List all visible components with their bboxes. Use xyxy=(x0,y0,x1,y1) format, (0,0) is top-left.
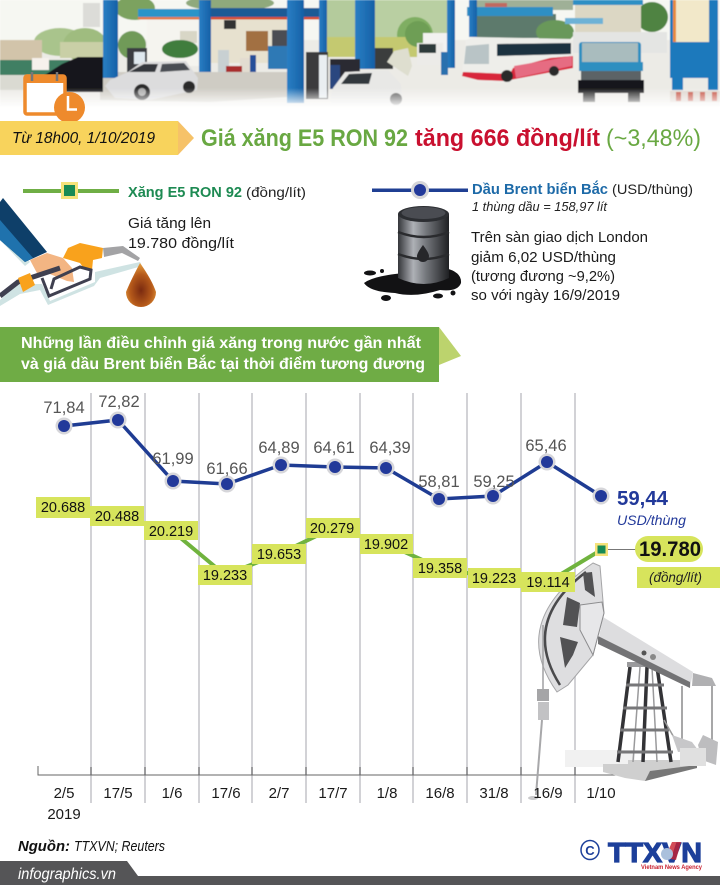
Brent value labels: 64,39 xyxy=(369,439,411,457)
date banner xyxy=(0,121,194,155)
x-axis dates: 1/8 xyxy=(377,785,397,802)
Brent value labels: 64,89 xyxy=(258,439,300,457)
blue truck xyxy=(578,42,644,102)
x-axis dates: 2/5 xyxy=(54,785,74,802)
title: Giá xăng E5 RON 92 xyxy=(201,125,408,152)
callout: latest Brent value: 59,44 xyxy=(617,488,669,510)
icon: oil pumpjack xyxy=(528,563,718,800)
icon: oil barrel xyxy=(364,206,461,301)
Brent value labels: 64,61 xyxy=(313,439,355,457)
beige car xyxy=(387,48,412,76)
source xyxy=(18,838,165,855)
x-axis dates: 2/7 xyxy=(269,785,289,802)
text: price rise xyxy=(128,215,235,252)
Brent value labels: 72,82 xyxy=(98,393,140,411)
white van xyxy=(417,33,447,65)
legend: E5 RON 92: (đồng/lít) xyxy=(246,184,306,200)
section banner: Những lần điều chỉnh giá xăng trong nước gần nhất xyxy=(21,335,421,352)
sign tower xyxy=(670,0,720,102)
x-axis dates: 17/5 xyxy=(103,785,133,802)
footer bar: infographics.vn xyxy=(18,866,116,883)
E5 value labels: 19.653 xyxy=(257,547,301,563)
TTXVN logo: Vietnam News Agency xyxy=(641,864,702,871)
white small car xyxy=(330,70,402,107)
photo: petrol station header xyxy=(0,0,720,114)
E5 value labels: 20.279 xyxy=(310,521,354,537)
Brent value labels: 58,81 xyxy=(418,473,460,491)
ground xyxy=(100,72,287,102)
E5 value labels: 19.114 xyxy=(526,575,570,591)
section banner: và giá dầu Brent biển Bắc tại thời điểm tương đương xyxy=(21,355,425,373)
x-axis dates: 17/7 xyxy=(318,785,348,802)
x-axis dates: 16/8 xyxy=(425,785,455,802)
x-axis dates: 1/6 xyxy=(162,785,182,802)
line: E5 RON 92 price xyxy=(63,507,636,582)
black SUV xyxy=(40,57,103,92)
x-axis dates: 16/9 xyxy=(533,785,563,802)
text: London market: Trên sàn giao dịch London xyxy=(471,229,648,246)
Brent value labels: 65,46 xyxy=(525,437,567,455)
legend: E5 RON 92 xyxy=(23,182,306,201)
E5 value labels: 20.688 xyxy=(41,500,85,516)
text: price rise: Giá tăng lên xyxy=(128,215,211,232)
E5 value labels: 20.219 xyxy=(149,524,193,540)
text: London market: giảm 6,02 USD/thùng xyxy=(471,249,616,266)
chart gridlines and axis xyxy=(38,393,628,803)
E5 value labels: 20.488 xyxy=(95,509,139,525)
source: Nguồn: xyxy=(18,838,70,855)
x-axis dates: 31/8 xyxy=(479,785,509,802)
Brent value labels: 59,25 xyxy=(473,473,515,491)
callout: latest E5 price: 19.780 xyxy=(639,538,701,561)
x-axis dates xyxy=(47,785,616,823)
TTXVN logo xyxy=(581,837,702,871)
text: price rise: 19.780 đồng/lít xyxy=(128,235,235,252)
date banner: Từ 18h00, 1/10/2019 xyxy=(12,130,155,147)
Brent value labels xyxy=(43,393,567,491)
silver SUV xyxy=(105,61,198,100)
title: tăng 666 đồng/lít xyxy=(415,125,600,152)
E5 value labels: 19.358 xyxy=(418,561,462,577)
Brent value labels: 61,99 xyxy=(152,450,194,468)
dispensers xyxy=(306,52,328,99)
icon: calendar and clock xyxy=(25,72,85,123)
text: London market xyxy=(471,229,648,304)
pillars xyxy=(103,0,477,103)
legend: Brent: Dầu Brent biển Bắc xyxy=(472,180,608,198)
title: (~3,48%) xyxy=(606,125,701,152)
bus xyxy=(462,37,573,83)
Brent value labels: 61,66 xyxy=(206,460,248,478)
callout: latest E5 price xyxy=(635,536,720,588)
footer bar xyxy=(0,861,720,885)
legend: Brent: 1 thùng dầu = 158,97 lít xyxy=(472,200,608,214)
text: London market: so với ngày 16/9/2019 xyxy=(471,287,620,304)
E5 value labels: 19.223 xyxy=(472,571,516,587)
source: TTXVN; Reuters xyxy=(74,838,165,855)
legend: Brent: (USD/thùng) xyxy=(612,181,693,197)
callout: latest E5 price: (đồng/lít) xyxy=(649,570,702,585)
x-axis dates: 17/6 xyxy=(211,785,241,802)
callout: latest Brent value: USD/thùng xyxy=(617,512,686,528)
legend: E5 RON 92: Xăng E5 RON 92 xyxy=(128,185,242,201)
E5 value labels: 19.902 xyxy=(364,537,408,553)
section banner xyxy=(0,327,461,382)
E5 value labels: 19.233 xyxy=(203,568,247,584)
icon: hand on fuel nozzle xyxy=(0,198,156,307)
callout: latest Brent value xyxy=(617,488,686,528)
background: trees left xyxy=(34,0,274,62)
icon: oil drop xyxy=(126,263,156,307)
TTXVN logo: C xyxy=(585,843,595,858)
TTXVN logo: TTXVN xyxy=(608,837,702,868)
text: London market: (tương đương ~9,2%) xyxy=(471,268,615,285)
background: trees and field right xyxy=(327,0,668,57)
x-axis dates: 2019 xyxy=(47,806,81,823)
x-axis dates: 1/10 xyxy=(586,785,616,802)
legend: Brent xyxy=(372,180,693,214)
Brent value labels: 71,84 xyxy=(43,399,85,417)
line: Brent price xyxy=(56,412,610,508)
building xyxy=(127,8,319,82)
title xyxy=(201,125,701,152)
E5 value labels xyxy=(36,497,575,592)
